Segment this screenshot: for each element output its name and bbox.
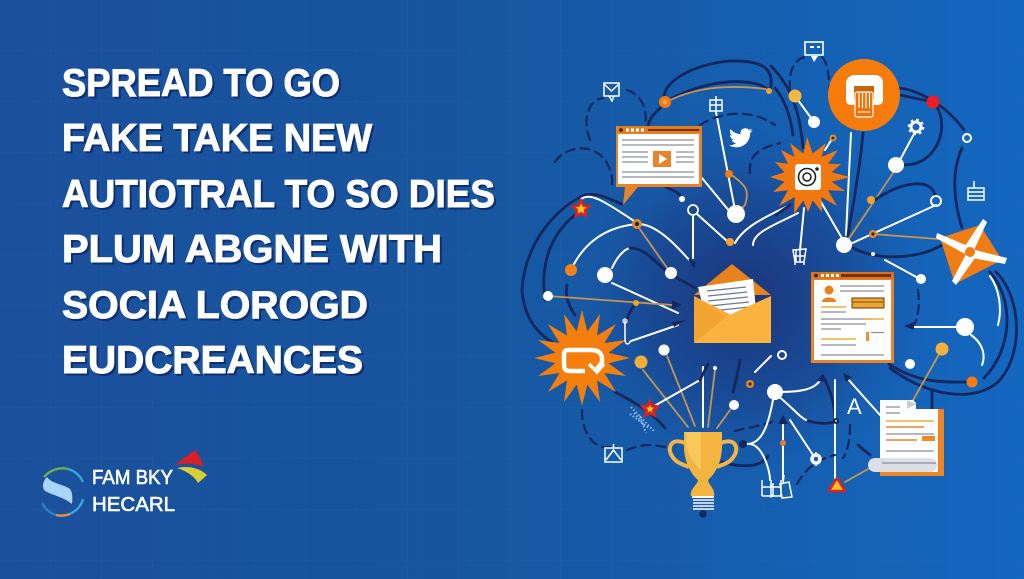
title: EUDCREANCES: [62, 339, 363, 382]
title: PLUM ABGNE WITH: [64, 230, 444, 273]
title: SOCIA LOROGD: [64, 286, 370, 329]
icon: hook: [623, 319, 630, 344]
logo wordmark: HECARL: [92, 494, 175, 516]
title: AUTIOTRAL TO SO DIES: [62, 173, 495, 216]
network connector lines: [522, 57, 1017, 484]
profile avatar: [822, 286, 836, 302]
icon: cart: [793, 249, 806, 265]
title: [62, 62, 497, 384]
logo ring mark: [42, 468, 83, 516]
icon: trophy bulb: [670, 432, 736, 518]
network nodes: [543, 88, 978, 448]
panel: video window: [616, 126, 702, 205]
document scroll: [868, 458, 937, 472]
icon: printer circle: [828, 59, 900, 131]
logo arcs: [175, 450, 207, 483]
envelope letter: [698, 279, 756, 322]
icon: instagram burst: [770, 137, 850, 214]
icon: warning triangle: [829, 478, 845, 491]
panel: document: [868, 400, 944, 476]
icon: gear bottom: [812, 452, 820, 466]
icon: mail bubble: [604, 83, 619, 101]
icon: bags: [770, 475, 792, 498]
title: FAKE TAKE NEW: [62, 117, 373, 160]
icon: list tag: [968, 181, 984, 200]
title: FAKE TAKE NEW: [64, 119, 375, 162]
icon: diamond propeller: [936, 219, 1007, 285]
logo wordmark: [92, 467, 175, 516]
sparkle dots: [630, 407, 654, 433]
panel: profile window: [811, 272, 894, 363]
icon: tower bottom: [762, 480, 781, 496]
icon: red star top: [573, 200, 589, 216]
icon: speech bubble: [805, 42, 823, 62]
icon: red star bottom: [643, 402, 657, 415]
logo wordmark: FAM BKY: [92, 467, 173, 489]
title: PLUM ABGNE WITH: [62, 228, 442, 271]
label: letter A: A: [847, 394, 862, 419]
icon: twitter bird: [729, 128, 753, 147]
icon: gear: [909, 120, 923, 134]
title: SPREAD TO GO: [64, 64, 342, 107]
icon: tower: [710, 96, 722, 112]
arrowheads: [672, 260, 914, 424]
title: AUTIOTRAL TO SO DIES: [64, 175, 497, 218]
title: EUDCREANCES: [64, 341, 365, 384]
icon: hanger frame: [605, 444, 622, 462]
icon: play button: [653, 151, 671, 167]
profile highlight box: [852, 298, 884, 308]
icon: repeat burst: [534, 310, 630, 406]
title: SPREAD TO GO: [62, 62, 340, 105]
panel: envelope: [694, 264, 771, 343]
logo: [42, 450, 207, 516]
title: SOCIA LOROGD: [62, 284, 368, 327]
